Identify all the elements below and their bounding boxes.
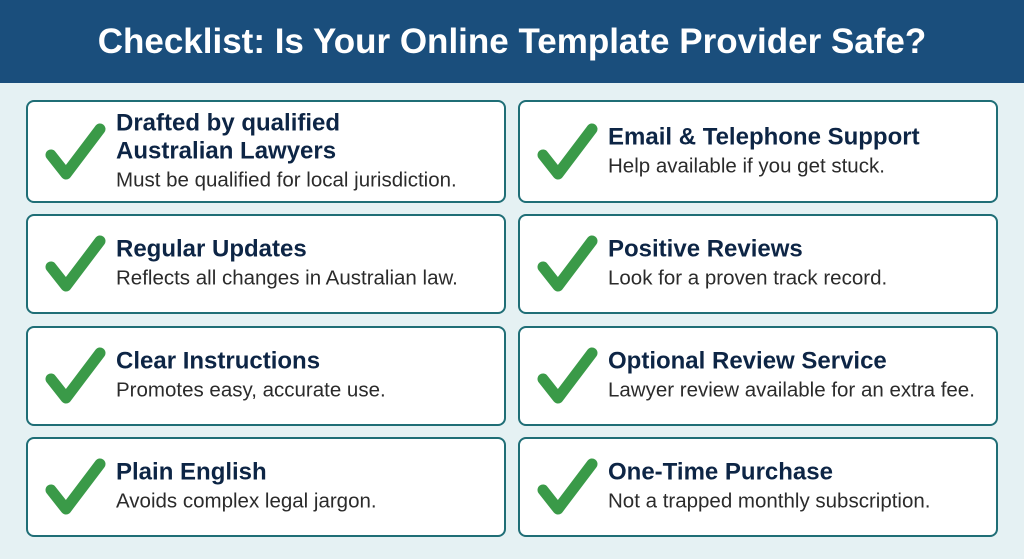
icon: check	[46, 458, 106, 514]
icon: check	[538, 124, 598, 180]
text	[608, 458, 930, 512]
text	[116, 458, 377, 512]
card: drafted by lawyers	[26, 100, 506, 203]
icon: check	[46, 236, 106, 292]
text	[116, 348, 386, 402]
icon: check	[538, 348, 598, 404]
text: Plain English	[116, 458, 267, 486]
text: Not a trapped monthly subscription.	[608, 490, 930, 512]
text: Avoids complex legal jargon.	[116, 490, 377, 512]
text: Optional Review Service	[608, 348, 887, 374]
text: Reflects all changes in Australian law.	[116, 266, 458, 290]
text	[116, 109, 457, 191]
text: Clear Instructions	[116, 348, 320, 374]
text: Help available if you get stuck.	[608, 154, 885, 177]
text	[608, 123, 920, 177]
text: Regular Updates	[116, 236, 307, 262]
card: email support	[518, 100, 998, 203]
text: Email & Telephone Support	[608, 123, 920, 150]
text: Look for a proven track record.	[608, 266, 887, 290]
text	[608, 348, 975, 402]
text: One-Time Purchase	[608, 458, 833, 486]
icon: check	[538, 458, 598, 514]
text: Must be qualified for local jurisdiction.	[116, 168, 457, 191]
text	[608, 236, 887, 290]
card: clear instructions	[26, 326, 506, 426]
text: Promotes easy, accurate use.	[116, 378, 386, 402]
title	[0, 0, 1024, 83]
text: Lawyer review available for an extra fee.	[608, 378, 975, 402]
text: Positive Reviews	[608, 236, 803, 262]
text	[116, 236, 458, 290]
card: one-time purchase	[518, 437, 998, 537]
title: Checklist: Is Your Online Template Provider Safe?	[98, 22, 926, 61]
icon: check	[46, 124, 106, 180]
icon: check	[46, 348, 106, 404]
card: plain english	[26, 437, 506, 537]
card: optional review	[518, 326, 998, 426]
text: Drafted by qualified	[116, 109, 340, 136]
card: positive reviews	[518, 214, 998, 314]
icon: check	[538, 236, 598, 292]
card: regular updates	[26, 214, 506, 314]
text: Australian Lawyers	[116, 137, 336, 164]
